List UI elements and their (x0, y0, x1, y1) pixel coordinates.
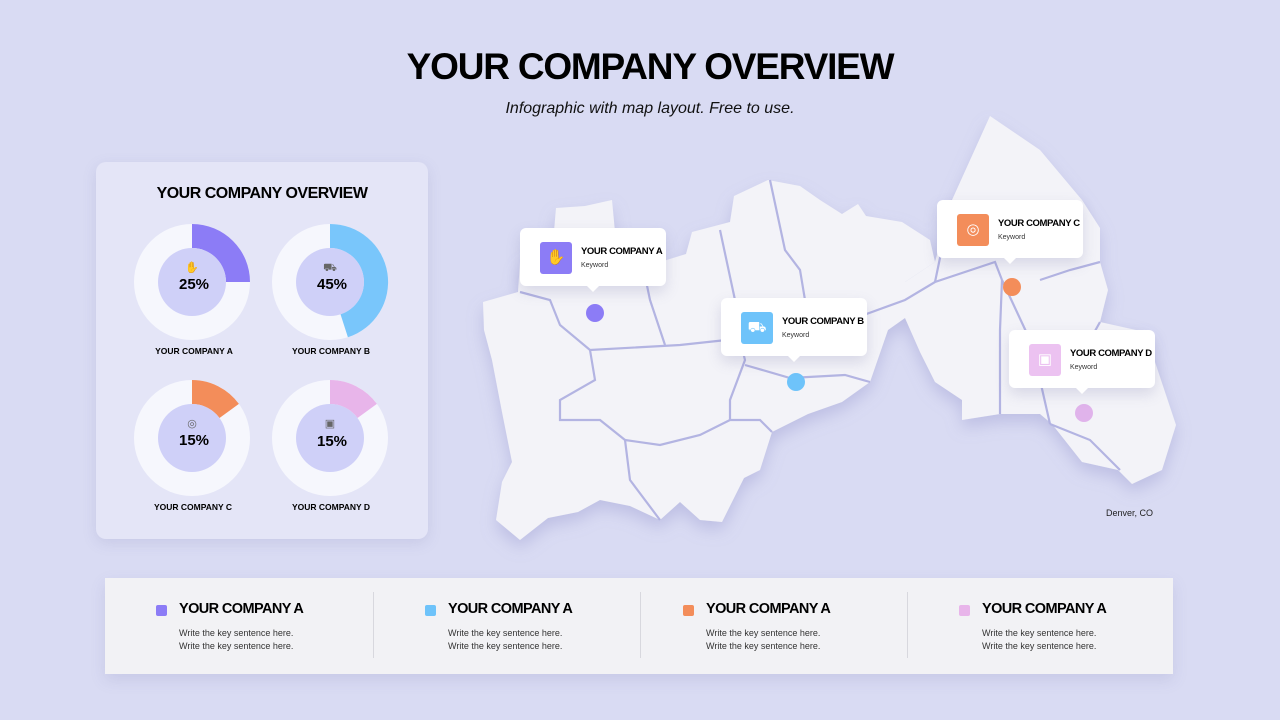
donut charts: ◎ (187, 418, 197, 430)
donut charts: 45% (317, 276, 347, 293)
card: company B: ⛟ (748, 319, 766, 336)
donut charts: YOUR COMPANY D (292, 502, 370, 512)
card: company B (721, 298, 867, 356)
card: company A: ✋ (547, 249, 565, 266)
legend item 3 (683, 601, 830, 651)
donut charts: 25% (179, 276, 209, 293)
card: company C: Keyword (998, 234, 1025, 241)
legend item 3: YOUR COMPANY A (706, 601, 830, 617)
card: company D: YOUR COMPANY D (1070, 348, 1152, 359)
legend item 4: YOUR COMPANY A (982, 601, 1106, 617)
card: company D: Keyword (1070, 364, 1097, 371)
card: company D: ▣ (1038, 351, 1052, 368)
legend item 4: Write the key sentence here. (982, 628, 1096, 638)
legend item 3: Write the key sentence here. (706, 641, 820, 651)
legend item 1: Write the key sentence here. (179, 641, 293, 651)
legend item 4: Write the key sentence here. (982, 641, 1096, 651)
legend item 1 (156, 601, 304, 651)
legend item 2: Write the key sentence here. (448, 628, 562, 638)
legend item 3: Write the key sentence here. (706, 628, 820, 638)
card: company A: YOUR COMPANY A (581, 246, 662, 257)
dots (586, 304, 604, 322)
donut charts: YOUR COMPANY C (154, 502, 232, 512)
card: company B: YOUR COMPANY B (782, 316, 864, 327)
donut charts: 15% (317, 433, 347, 450)
legend item 2: Write the key sentence here. (448, 641, 562, 651)
donut charts (134, 224, 388, 512)
subtitle: Infographic with map layout. Free to use. (505, 100, 795, 117)
panel heading: YOUR COMPANY OVERVIEW (157, 185, 367, 202)
donut charts: ✋ (185, 261, 199, 274)
legend item 1: Write the key sentence here. (179, 628, 293, 638)
card: company D (1009, 330, 1155, 388)
legend item 4 (959, 601, 1106, 651)
card: company B: Keyword (782, 332, 809, 339)
panel: donut overview (96, 162, 428, 539)
card: company C: YOUR COMPANY C (998, 218, 1080, 229)
donut charts: YOUR COMPANY B (292, 346, 370, 356)
donut charts: ⛟ (323, 262, 337, 274)
panel: legend bar (105, 578, 1173, 674)
donut charts: ▣ (325, 418, 335, 430)
donut charts: YOUR COMPANY A (155, 346, 233, 356)
card: company C (937, 200, 1083, 258)
title: YOUR COMPANY OVERVIEW (407, 46, 893, 87)
legend item 2: YOUR COMPANY A (448, 601, 572, 617)
legend item 2 (425, 601, 572, 651)
donut charts: 15% (179, 432, 209, 449)
card: company A: Keyword (581, 262, 608, 269)
card: company A (520, 228, 666, 286)
legend item 1: YOUR COMPANY A (179, 601, 303, 617)
card: company C: ◎ (966, 221, 980, 238)
map label: Denver, CO (1106, 508, 1153, 518)
